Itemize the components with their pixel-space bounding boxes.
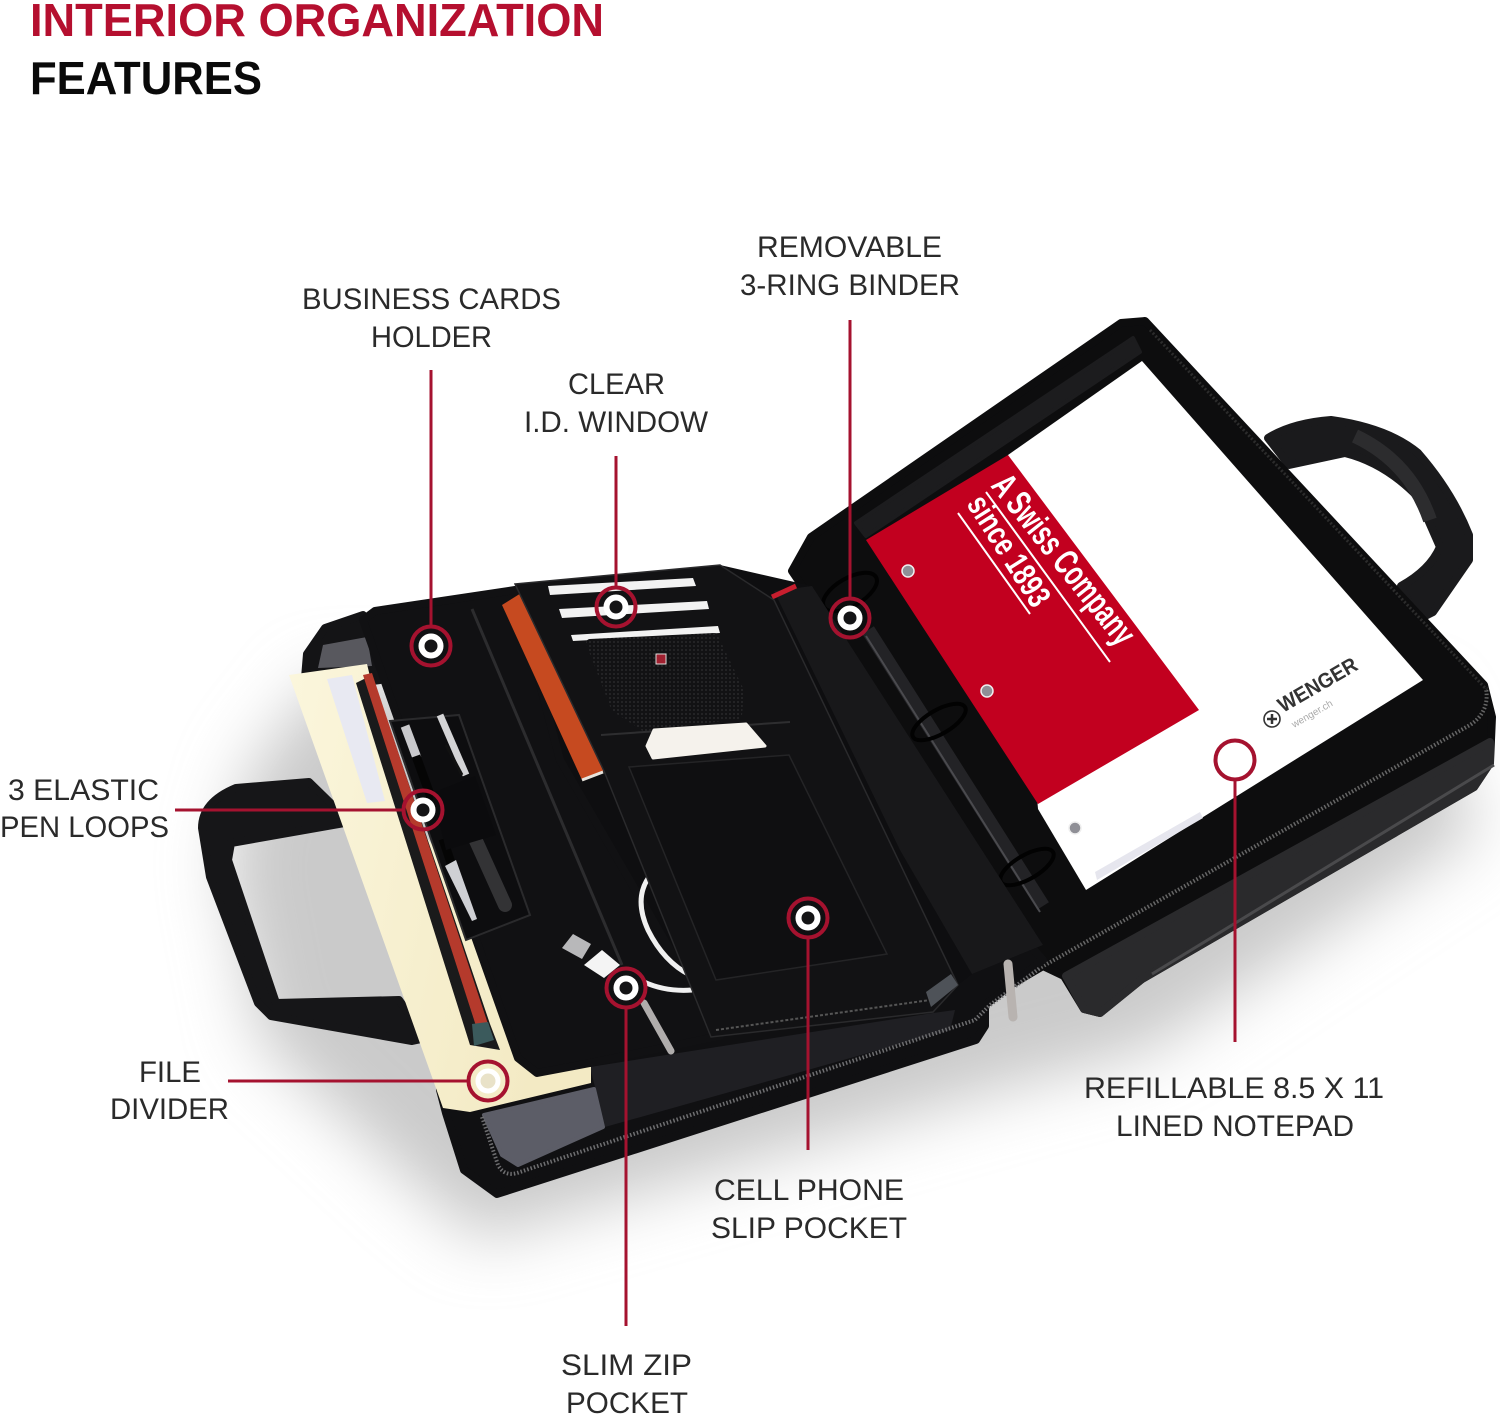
callout: refillable notepad: LINED NOTEPAD xyxy=(1116,1110,1354,1143)
elastic loop xyxy=(432,776,496,850)
mesh pocket xyxy=(590,637,740,727)
orange notebook xyxy=(502,590,604,780)
interior backing of center fold xyxy=(515,565,1043,1067)
clear sheet in folder xyxy=(327,675,385,803)
handle grip xyxy=(1355,436,1430,520)
grey interior back xyxy=(318,637,372,668)
notepad lower sheets xyxy=(1095,812,1203,880)
zipper pull left xyxy=(644,1003,671,1051)
callout: cell phone slip pocket xyxy=(711,898,907,1245)
lid top bar xyxy=(856,338,1140,536)
callout: refillable notepad xyxy=(1084,740,1384,1143)
binder highlight xyxy=(866,636,1040,912)
callout: business cards holder: BUSINESS CARDS xyxy=(302,283,561,316)
zipper pull right xyxy=(1008,964,1013,1017)
card slots xyxy=(548,578,720,641)
inner zip on lid top xyxy=(1150,330,1487,690)
red cover slogan xyxy=(958,465,1145,662)
notepad punch holes xyxy=(902,565,1081,834)
pen panel xyxy=(390,715,530,940)
lid zipper xyxy=(1038,688,1487,969)
red cover slogan: A Swiss Company xyxy=(984,465,1145,653)
back interior top corner xyxy=(304,615,380,690)
phone slip pocket xyxy=(629,755,887,980)
leather fold grey corner xyxy=(926,974,958,1007)
red cover slogan: since 1893 xyxy=(960,488,1058,613)
Wenger logo: wenger.ch xyxy=(1289,698,1335,731)
callout: clear ID window xyxy=(524,368,709,626)
callout: slim zip pocket xyxy=(561,968,692,1416)
title: FEATURES xyxy=(30,52,262,104)
Wenger logo xyxy=(1264,653,1362,731)
product shadow xyxy=(225,680,1480,1240)
callout: cell phone slip pocket: SLIP POCKET xyxy=(711,1212,907,1245)
notepad cover: red band xyxy=(866,455,1199,804)
title xyxy=(30,0,604,104)
Wenger logo: WENGER xyxy=(1274,653,1362,717)
left inner flap xyxy=(363,590,720,1073)
product: open portfolio case xyxy=(202,321,1494,1194)
center fold panel xyxy=(774,586,1043,974)
binder spine xyxy=(868,630,1043,906)
leather organizer panel xyxy=(515,565,958,1037)
notebook page edge xyxy=(582,772,603,780)
leather base stitching xyxy=(716,1000,930,1030)
callout: file divider: DIVIDER xyxy=(110,1093,229,1126)
callout: file divider: FILE xyxy=(139,1056,201,1089)
callout: clear ID window: CLEAR xyxy=(568,368,665,401)
callout: file divider xyxy=(110,1056,508,1126)
white notepad xyxy=(1008,361,1423,890)
lid lower zip seam xyxy=(1152,765,1494,974)
callout: 3 elastic pen loops: PEN LOOPS xyxy=(0,811,169,844)
callout: 3 elastic pen loops xyxy=(0,774,442,844)
grey lining xyxy=(484,1089,603,1165)
callout: business cards holder: HOLDER xyxy=(371,321,492,354)
lower zipper xyxy=(482,968,1040,1174)
phone xyxy=(647,724,765,758)
right lid frame xyxy=(792,321,1492,1013)
callout: removable 3-ring binder: REMOVABLE xyxy=(757,231,942,264)
callout: slim zip pocket: SLIM ZIP xyxy=(561,1349,692,1382)
USB cable xyxy=(641,872,692,990)
pocket band line xyxy=(601,722,790,735)
pen two xyxy=(440,715,505,905)
callout: removable 3-ring binder: 3-RING BINDER xyxy=(740,269,960,302)
red pull tab xyxy=(772,586,796,597)
right carry handle xyxy=(1268,420,1469,620)
callout: business cards holder xyxy=(302,283,561,666)
lid leather edge xyxy=(1066,742,1490,1013)
left carry handle xyxy=(202,782,426,1041)
lower fabric panel xyxy=(590,1010,955,1127)
book end xyxy=(472,1022,494,1046)
inner zip line xyxy=(472,609,622,965)
lower case base xyxy=(440,900,1043,1194)
pen one xyxy=(405,726,477,921)
book red edge xyxy=(363,673,488,1026)
book spine xyxy=(356,675,500,1050)
callout: removable 3-ring binder xyxy=(740,231,960,638)
manila file folder xyxy=(289,664,591,1112)
callout: cell phone slip pocket: CELL PHONE xyxy=(714,1174,904,1207)
binder rings xyxy=(817,565,1059,892)
USB plug xyxy=(562,934,620,978)
callout: refillable notepad: REFILLABLE 8.5 X 11 xyxy=(1084,1072,1384,1105)
callout: 3 elastic pen loops: 3 ELASTIC xyxy=(8,774,159,807)
callout: clear ID window: I.D. WINDOW xyxy=(524,406,709,439)
mini badge xyxy=(656,654,666,664)
